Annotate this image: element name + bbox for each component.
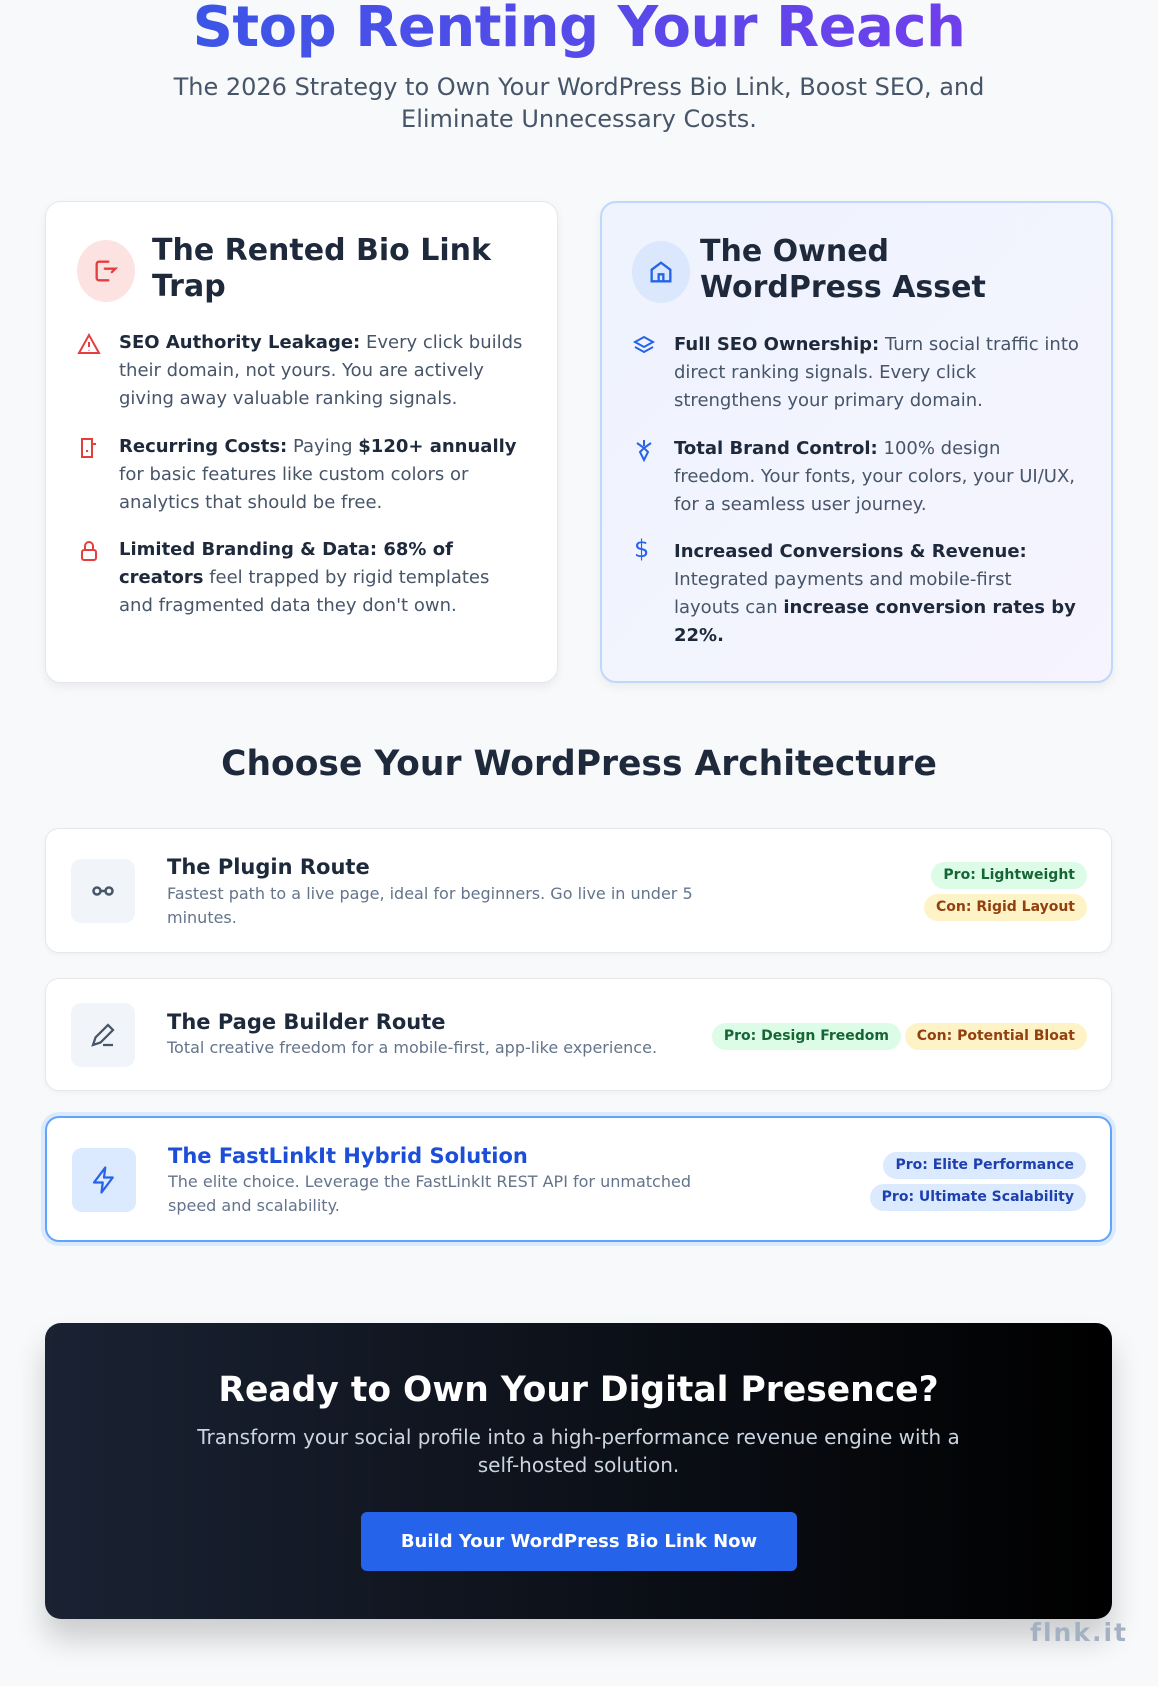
item: conversions: layouts can increase conversion rates by <box>674 597 1076 618</box>
tag: pro performance <box>883 1152 1086 1179</box>
tag: pro: Pro: Lightweight <box>943 867 1075 883</box>
tag: pro <box>931 862 1087 889</box>
tag: pro scalability <box>870 1184 1086 1211</box>
item: seo ownership: strengthens your primary domain. <box>674 390 983 411</box>
cta button: Build Your WordPress Bio Link Now <box>401 1531 757 1552</box>
tag: pro scalability: Pro: Ultimate Scalability <box>882 1189 1074 1205</box>
cta panel <box>45 1323 1112 1619</box>
panel: page builder route <box>45 978 1112 1091</box>
tag: pro: Pro: Design Freedom <box>724 1028 889 1044</box>
icon: plugin <box>71 859 135 923</box>
item: brand control: for a seamless user journey. <box>674 494 927 515</box>
subtitle: The 2026 Strategy to Own Your WordPress Bio Link, Boost SEO, and <box>174 73 984 101</box>
cta heading: Ready to Own Your Digital Presence? <box>218 1370 939 1410</box>
item: seo ownership: direct ranking signals. Every click <box>674 362 976 383</box>
subtitle: Eliminate Unnecessary Costs. <box>401 105 757 133</box>
title <box>0 0 1158 66</box>
item: seo ownership <box>674 334 1079 411</box>
icon: warning <box>77 333 101 354</box>
item: seo ownership: Full SEO Ownership: Turn social traffic into <box>674 334 1079 355</box>
item: seo leakage: SEO Authority Leakage: Every click builds their domain, not yours. You are actively giving away valuable ranking signals. <box>119 332 522 409</box>
heading: The Rented Bio Link <box>152 233 491 268</box>
cta button <box>361 1512 797 1571</box>
item: brand control <box>674 438 1075 515</box>
icon: brand <box>636 440 652 462</box>
item: brand control: Total Brand Control: 100% design <box>674 438 1000 459</box>
panel: owned wordpress asset <box>600 201 1113 683</box>
tag: pro performance: Pro: Elite Performance <box>895 1157 1074 1173</box>
heading: WordPress Asset <box>700 270 986 305</box>
icon: pencil <box>71 1003 135 1067</box>
item: conversions: Increased Conversions & Revenue: <box>674 541 1027 562</box>
icon: layers <box>633 336 655 354</box>
route description: The elite choice. Leverage the FastLinkIt REST API for unmatched speed and scalability. <box>168 1172 691 1215</box>
tag: con: Con: Potential Bloat <box>917 1028 1075 1044</box>
cta text: Transform your social profile into a high-performance revenue engine with a <box>197 1425 960 1449</box>
subtitle <box>174 73 984 133</box>
heading <box>700 234 986 305</box>
heading: The Owned <box>700 234 889 269</box>
icon: house <box>632 241 690 303</box>
route title: The Plugin Route <box>167 855 370 879</box>
tag: pro <box>712 1023 901 1050</box>
item: conversions: 22%. <box>674 625 724 646</box>
icon: lightning <box>72 1148 136 1212</box>
panel: plugin route <box>45 828 1112 953</box>
icon: exit <box>77 240 135 302</box>
item: limited branding: Limited Branding & Data: 68% of creators feel trapped by rigid templates and fragmented data they don't own. <box>119 539 489 616</box>
tag: con <box>905 1023 1087 1050</box>
cta text <box>197 1425 960 1477</box>
item: brand control: freedom. Your fonts, your colors, your UI/UX, <box>674 466 1075 487</box>
icon: receipt <box>81 438 96 458</box>
panel: rented bio link trap <box>45 201 558 683</box>
section heading: Choose Your WordPress Architecture <box>221 744 937 784</box>
route description: Total creative freedom for a mobile-first, app-like experience. <box>167 1038 657 1057</box>
route title: The FastLinkIt Hybrid Solution <box>168 1144 528 1168</box>
tag: con <box>924 894 1087 921</box>
cta text: self-hosted solution. <box>478 1453 679 1477</box>
watermark: flnk.it <box>1030 1618 1128 1647</box>
item: conversions <box>674 541 1076 646</box>
heading: Trap <box>152 269 226 304</box>
panel: fastlinkit hybrid <box>45 1116 1112 1242</box>
route description: Fastest path to a live page, ideal for beginners. Go live in under 5 minutes. <box>167 884 693 927</box>
heading <box>152 233 492 304</box>
item: conversions: Integrated payments and mobile-first <box>674 569 1012 590</box>
icon: lock <box>81 541 97 561</box>
route title: The Page Builder Route <box>167 1010 446 1034</box>
icon: dollar: $ <box>634 535 649 563</box>
tag: con: Con: Rigid Layout <box>936 899 1075 915</box>
item: recurring costs: Recurring Costs: Paying $120+ annually for basic features like custom colors or analytics that should be free. <box>119 436 517 513</box>
